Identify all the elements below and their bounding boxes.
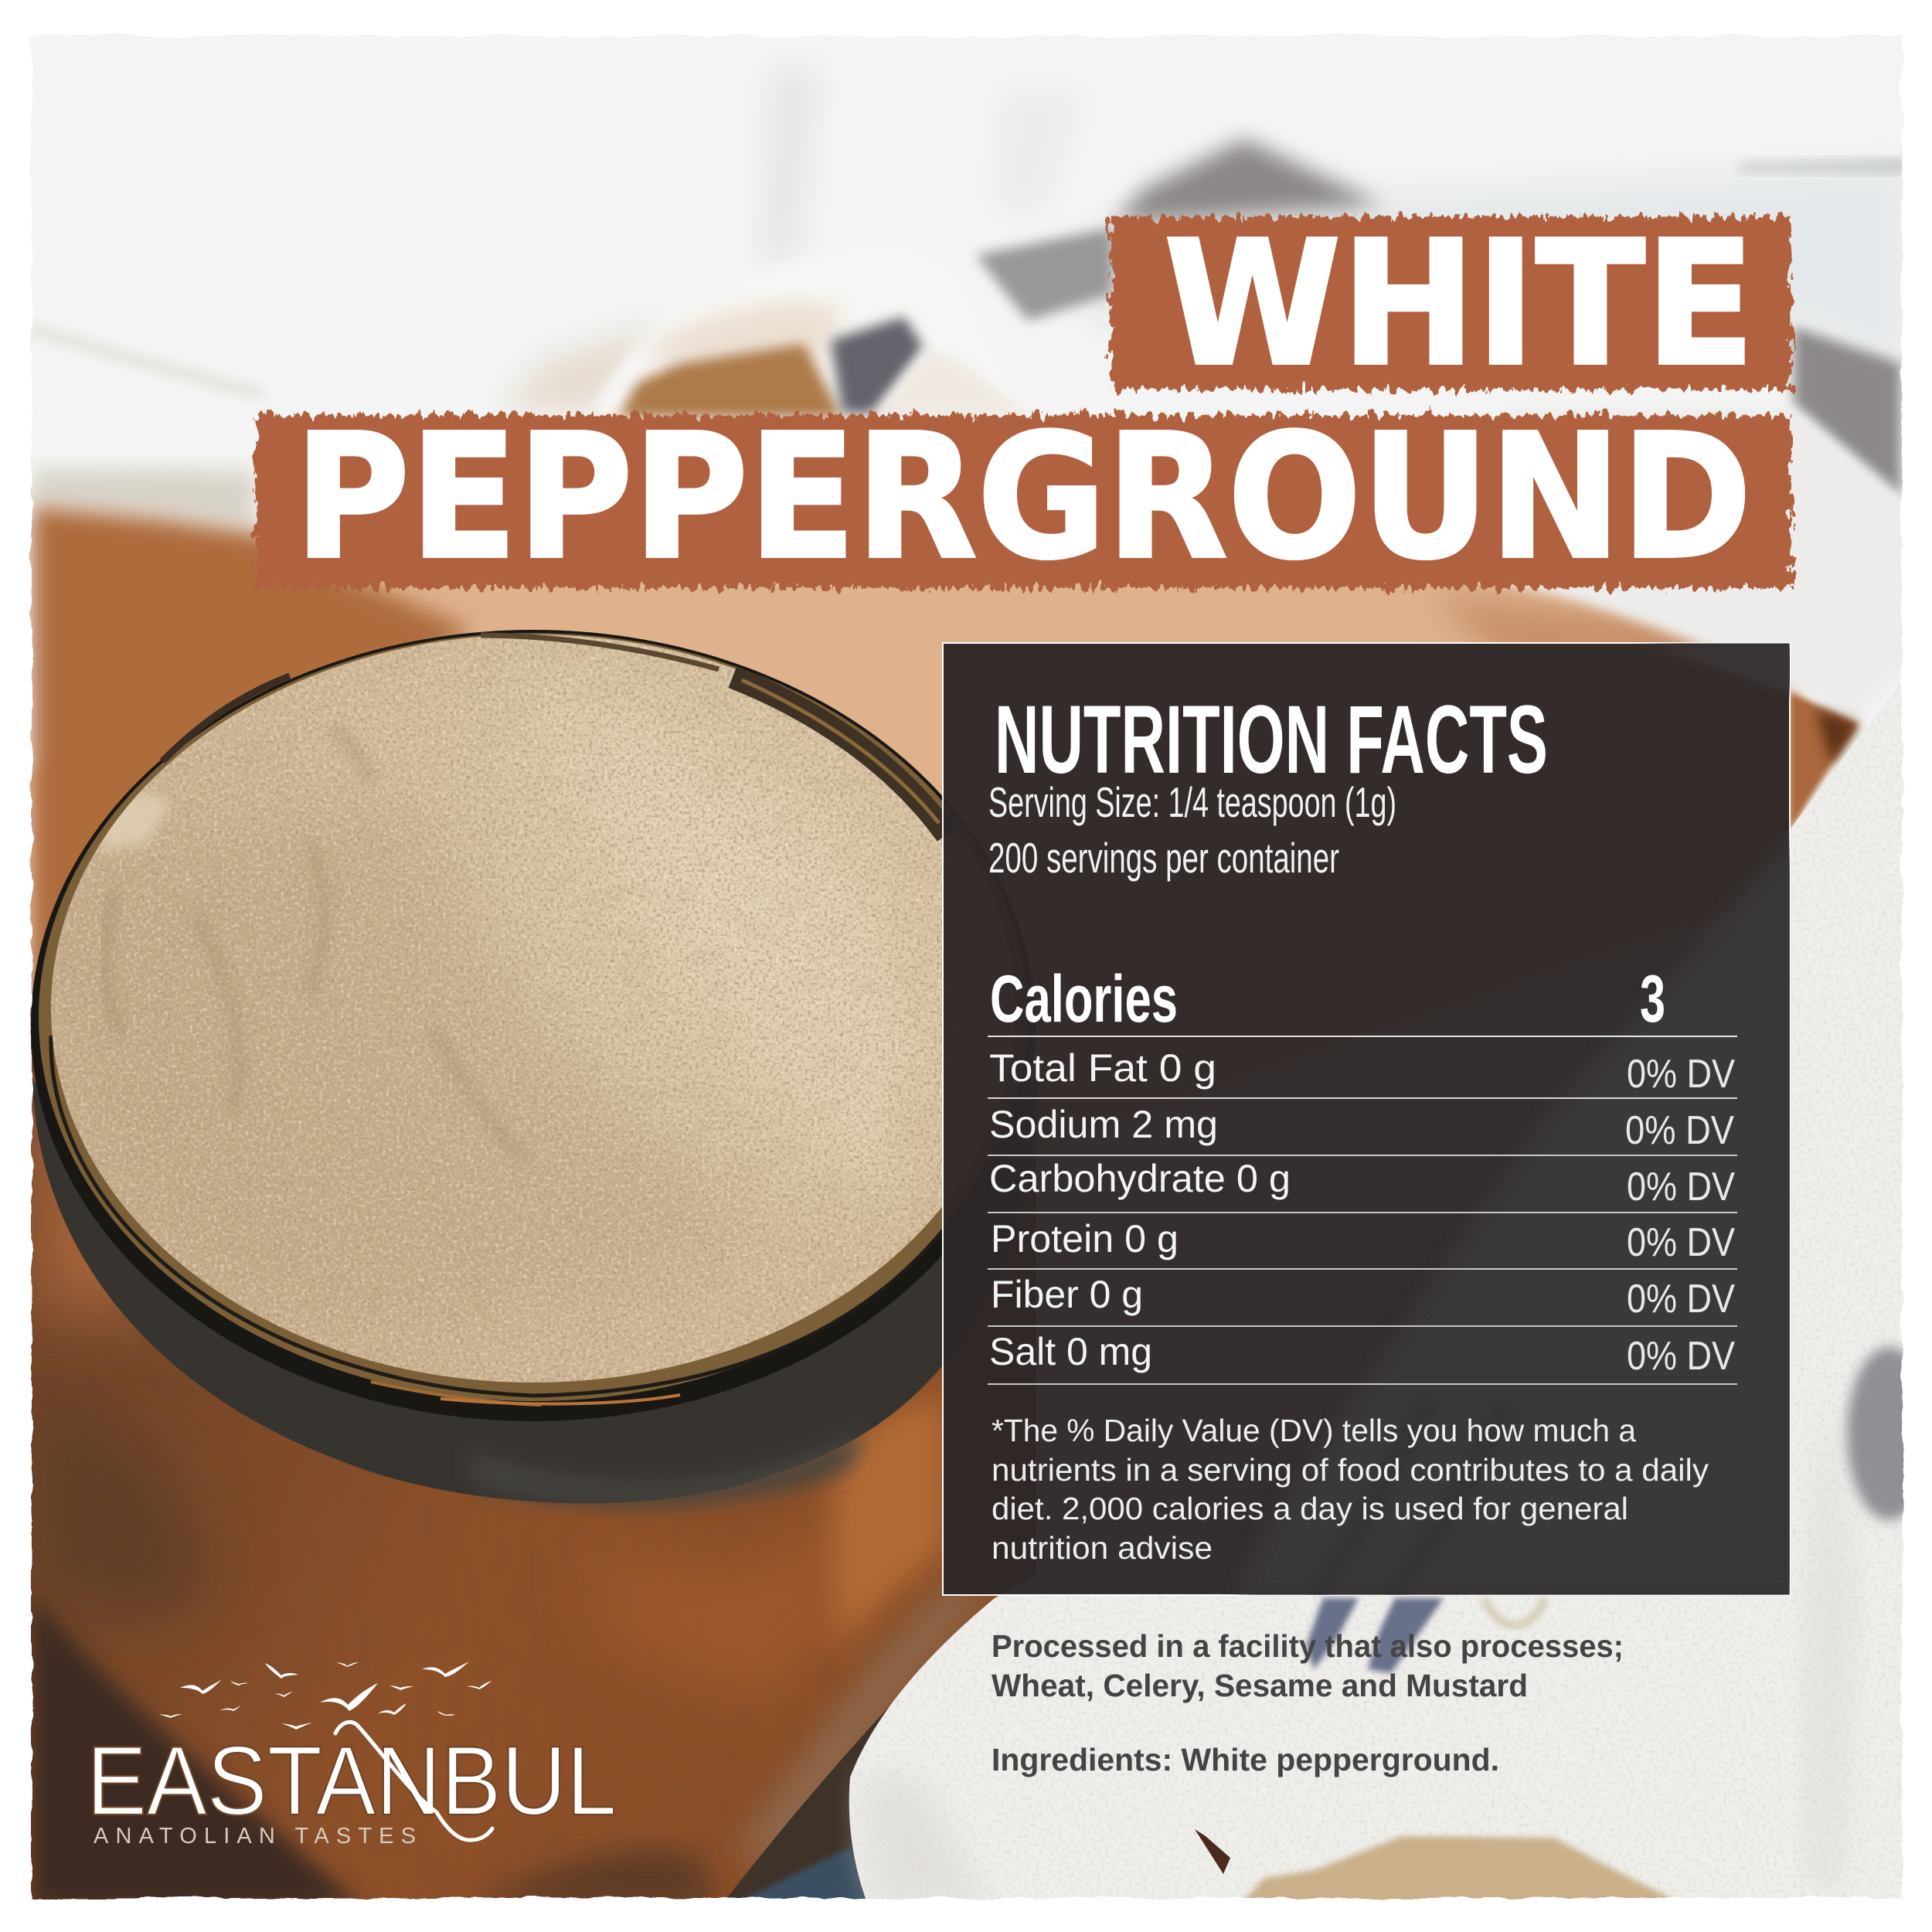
left board edge [32,505,473,1159]
daily value footnote: nutrition advise [992,1530,1213,1566]
dark rim at upper right [733,677,947,835]
daily value footnote: nutrients in a serving of food contributes to a daily [992,1452,1709,1488]
swash of the N [335,1722,492,1840]
white cloth fold on the right [1468,410,1909,723]
bowl body [32,1082,1039,1503]
title [255,205,1791,597]
row: carbohydrate: Carbohydrate 0 g [989,1157,1291,1200]
row: total fat: Total Fat 0 g [989,1046,1216,1090]
bowl [31,626,1039,1505]
servings per container: 200 servings per container [988,834,1339,882]
row: fiber: Fiber 0 g [991,1273,1143,1316]
rim highlights [371,1382,541,1405]
icon: flock of birds [159,1662,492,1730]
row: sodium: 0% DV [1625,1108,1734,1153]
row: fiber [991,1273,1735,1321]
row: protein: Protein 0 g [991,1217,1179,1260]
daily value footnote: *The % Daily Value (DV) tells you how much a [992,1413,1636,1448]
grey dotted patch [1847,1347,1932,1520]
white cloth at the top [31,70,1082,526]
row: carbohydrate [989,1157,1735,1209]
blue stitched stripes [1306,1598,1359,1669]
row: fiber: 0% DV [1627,1277,1735,1321]
powder [51,634,1015,1383]
cloth fold [591,240,1036,417]
title banner: WHITE: WHITE [1164,205,1755,404]
cloth on the right [849,672,1932,1909]
serving size: Serving Size: 1/4 teaspoon (1g) [988,778,1396,826]
row: salt: Salt 0 mg [989,1330,1152,1373]
wood patch on the right [1791,692,1859,828]
logo: Eastanbul [87,1662,617,1849]
title banner: PEPPERGROUND: PEPPERGROUND [294,398,1752,597]
allergen and ingredients text: Processed in a facility that also processes; [992,1628,1624,1664]
allergen and ingredients text [992,1628,1624,1777]
calories row [990,962,1665,1036]
row: total fat [989,1046,1735,1097]
row: protein: 0% DV [1627,1220,1735,1265]
row: carbohydrate: 0% DV [1627,1165,1735,1209]
calories row: 3 [1640,962,1665,1036]
allergen and ingredients text: Ingredients: White pepperground. [992,1742,1499,1777]
calories row: Calories [990,962,1178,1036]
row: salt: 0% DV [1627,1334,1735,1379]
row: protein [991,1217,1735,1265]
row: sodium: Sodium 2 mg [989,1103,1218,1146]
daily value footnote: diet. 2,000 calories a day is used for general [992,1491,1628,1526]
allergen and ingredients text: Wheat, Celery, Sesame and Mustard [992,1668,1528,1703]
beige hole in the cloth [1236,1836,1692,1909]
grey striped cloth [976,139,1909,501]
wordmark: EASTANBUL [87,1726,617,1835]
row: salt [989,1330,1735,1379]
bowl rim [31,630,1036,1421]
row: sodium [989,1103,1734,1153]
daily value footnote [992,1413,1709,1566]
row: total fat: 0% DV [1627,1052,1735,1097]
light wood strip behind bowl [31,576,1801,1159]
lower wooden board [31,1005,1036,1924]
panel: nutrition facts [943,643,1801,1600]
nutrition heading: NUTRITION FACTS [995,686,1548,794]
tagline: ANATOLIAN TASTES [94,1824,416,1849]
